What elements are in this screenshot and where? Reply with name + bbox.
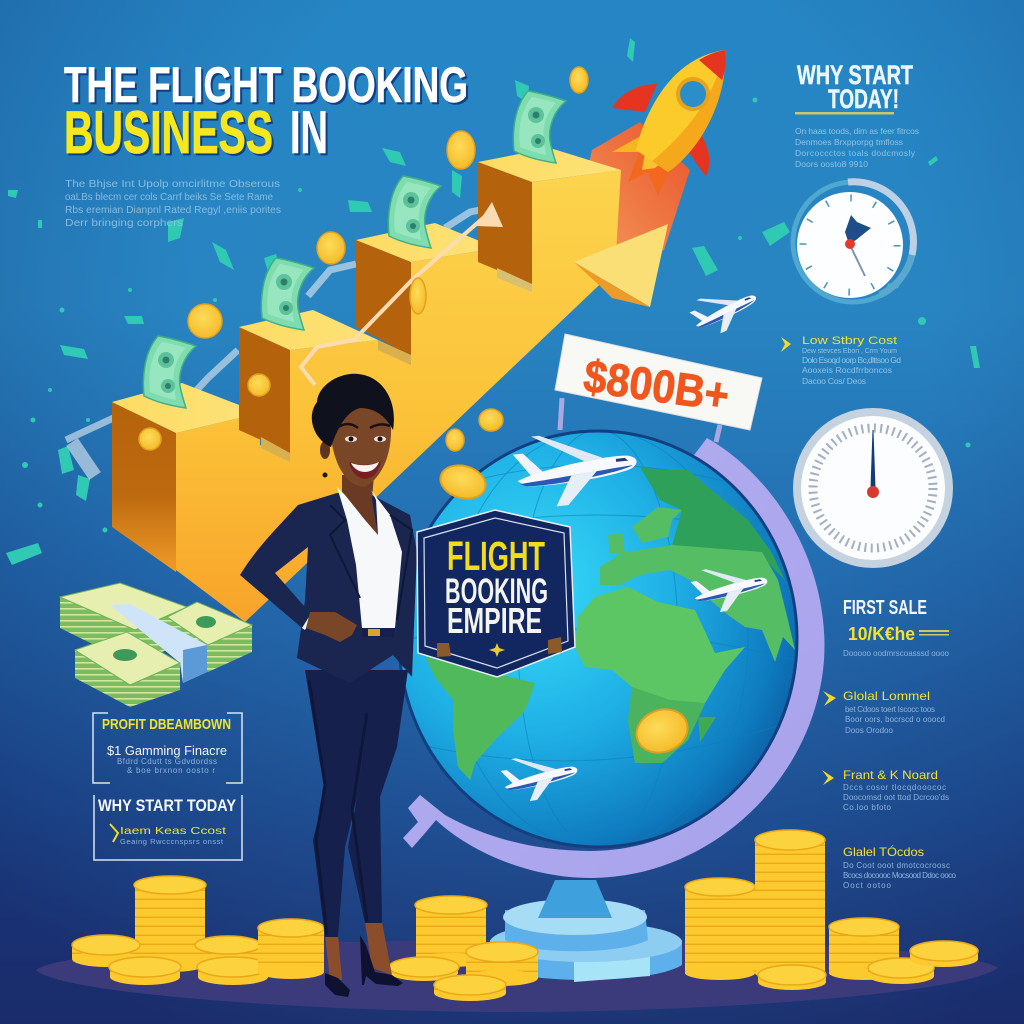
- global item 1: bet Cdoos toert Iscocc toos: [845, 705, 935, 714]
- land: madagascar: [698, 717, 716, 742]
- land: eurasia band: [600, 545, 795, 662]
- intro text block: The Bhjse Int Upolp omcirlitme Obserous: [65, 179, 280, 190]
- woman in navy suit: [240, 374, 417, 997]
- step 2 shadow: [261, 437, 290, 462]
- lapels: [330, 505, 412, 620]
- box: why start today: Geaing Rwcccnspsrs onsst: [120, 837, 224, 846]
- dollar bills rising from steps: [143, 91, 566, 408]
- left leg: [305, 670, 372, 937]
- heading: why start today: WHY START: [797, 60, 913, 90]
- step 2 side: [239, 327, 290, 453]
- dark platform: [36, 940, 998, 1012]
- badge: flight booking empire: EMPIRE: [447, 600, 542, 641]
- cuff: [302, 612, 315, 630]
- why start text: [795, 126, 919, 169]
- confetti: floating money bits: [6, 38, 980, 565]
- rocket: [612, 50, 726, 196]
- jacket: [240, 493, 417, 683]
- brows and eyes: [337, 424, 390, 428]
- shirt: [337, 487, 402, 628]
- large arrowhead: [574, 224, 668, 307]
- badge: flight booking empire: [417, 510, 575, 677]
- step 3 top: [356, 223, 497, 262]
- front bundle: [75, 632, 180, 707]
- floating gold coins: [139, 67, 588, 451]
- global item 1: [823, 689, 945, 735]
- global item 3: Bcocs docoooc Mocsood Ddoc ooco: [843, 871, 957, 880]
- title: IN: [290, 99, 328, 166]
- box: why start today: [94, 795, 242, 860]
- yellow front mass: [176, 170, 621, 622]
- first sale heading: [843, 597, 950, 658]
- face: [330, 407, 391, 487]
- grey trend ribbon behind steps: [66, 210, 480, 476]
- first sale heading: 10/K€he: [848, 624, 915, 644]
- badge: flight booking empire: FLIGHT: [447, 533, 545, 579]
- box: profit breakdown: Bfdrd Cdutt ts Gdvdordss: [117, 757, 217, 766]
- badge: flight booking empire: BOOKING: [445, 572, 548, 611]
- heading: why start today: TODAY!: [828, 84, 899, 114]
- ankles: [325, 922, 392, 980]
- box: why start today: Iaem Keas Ccost: [120, 825, 226, 837]
- box: profit breakdown: $1 Gamming Finacre: [107, 743, 227, 758]
- step 3 shadow: [378, 340, 411, 365]
- global item 3: [843, 844, 957, 890]
- land: africa and arabia: [575, 587, 745, 763]
- land: uk: [608, 533, 625, 553]
- why start text: Doors oosto8 9910: [795, 159, 868, 169]
- first sale heading: Dooooo oodmrscoasssd oooo: [843, 649, 950, 658]
- hand on hip: [306, 612, 357, 642]
- sign: $800B+: [555, 334, 762, 442]
- low startup cost item: Aooxeis Rocdfrrboncos: [802, 365, 892, 375]
- flame trail behind rocket: [572, 122, 690, 268]
- first sale heading: FIRST SALE: [843, 597, 927, 619]
- global item 2: [822, 768, 949, 812]
- land: north asia: [640, 467, 785, 580]
- title: [64, 57, 468, 166]
- right bundle: [167, 602, 252, 672]
- global item 1: Doos Orodoo: [845, 726, 894, 735]
- intro text block: oaLBs blecm cer cols Carrf beiks Se Sete Rame: [65, 192, 273, 203]
- belt: [362, 628, 394, 637]
- step 1 left face: [112, 402, 176, 572]
- why start text: Dorcoccctos toals dodcmosly: [795, 148, 916, 158]
- global item 2: Co.loo bfoto: [843, 803, 892, 812]
- planes around the globe: [499, 279, 771, 805]
- global item 2: Doocomsd oot ttod Dcrcoo'ds: [843, 793, 949, 802]
- globe: [398, 430, 798, 848]
- box: why start today: WHY START TODAY: [98, 796, 237, 815]
- right leg: [348, 670, 408, 923]
- global item 2: Frant & K Noard: [843, 768, 938, 782]
- coin stacks: [72, 830, 978, 1001]
- clock: speed gauge: [793, 408, 953, 568]
- stand: lilac globe arc: [403, 438, 824, 878]
- sign: $800B+: $800B+: [581, 349, 732, 421]
- land: south america: [425, 657, 535, 780]
- back bundle: [60, 583, 187, 665]
- stand base pedestal: [490, 880, 682, 982]
- step 3 side: [356, 240, 411, 357]
- growth arrow line: [301, 202, 503, 385]
- low startup cost item: Dacoo Cos/ Deos: [802, 376, 866, 386]
- neck: [342, 475, 378, 535]
- step 4 side: [478, 162, 532, 285]
- clock: top: [793, 182, 913, 302]
- box: profit breakdown: & boe brxnon oosto r: [127, 766, 215, 775]
- intro text block: Rbs eremian Dianpnl Rated Regyl ,eniis porites: [65, 205, 281, 216]
- global item 1: Boor oors, bocrscd o ooocd: [845, 715, 945, 724]
- low startup cost item: Low Stbry Cost: [802, 335, 897, 347]
- global item 2: Dccs cosor tlocqdooococ: [843, 783, 946, 792]
- globe coins: [437, 461, 694, 760]
- intro text block: Derr bringing corphers: [65, 218, 183, 229]
- smile: [349, 461, 381, 479]
- box: profit breakdown: PROFIT DBEAMBOWN: [102, 716, 231, 733]
- low startup cost item: [781, 335, 901, 386]
- band: [110, 604, 207, 683]
- why start text: On haas toods, dim as feer fitrcos: [795, 126, 919, 136]
- staircase bar chart: rising gold blocks: [112, 148, 621, 622]
- step 4 top: [478, 148, 621, 182]
- land: scandinavia: [632, 507, 682, 543]
- step 4 shadow: [497, 268, 532, 292]
- title: THE FLIGHT BOOKING: [64, 57, 468, 113]
- global item 1: Glolal Lommel: [843, 689, 930, 703]
- hair: [312, 374, 394, 447]
- global item 3: Ooct ootoo: [843, 881, 892, 890]
- box: profit breakdown: [93, 713, 242, 783]
- title: BUSINESS: [64, 99, 273, 166]
- cash bundles: [60, 583, 252, 707]
- shoes: [325, 973, 350, 997]
- step 2 top: [239, 310, 378, 350]
- heading: why start today: [795, 60, 913, 114]
- why start text: Denmoes Brxpporpg tmfloss: [795, 137, 903, 147]
- hands on badge: [437, 637, 562, 657]
- low startup cost item: Dolo Esoqd oorp Bc,dlttsoo Gd: [802, 355, 901, 365]
- intro text block: [65, 179, 281, 229]
- low startup cost item: Dew stevces Ebon , Crm Youm: [802, 348, 897, 355]
- global item 3: Glalel TÓcdos: [843, 844, 924, 859]
- global item 3: Do Coot ooot dmotcocroosc: [843, 861, 950, 870]
- ear: [320, 441, 330, 459]
- step 1 top: [112, 383, 260, 433]
